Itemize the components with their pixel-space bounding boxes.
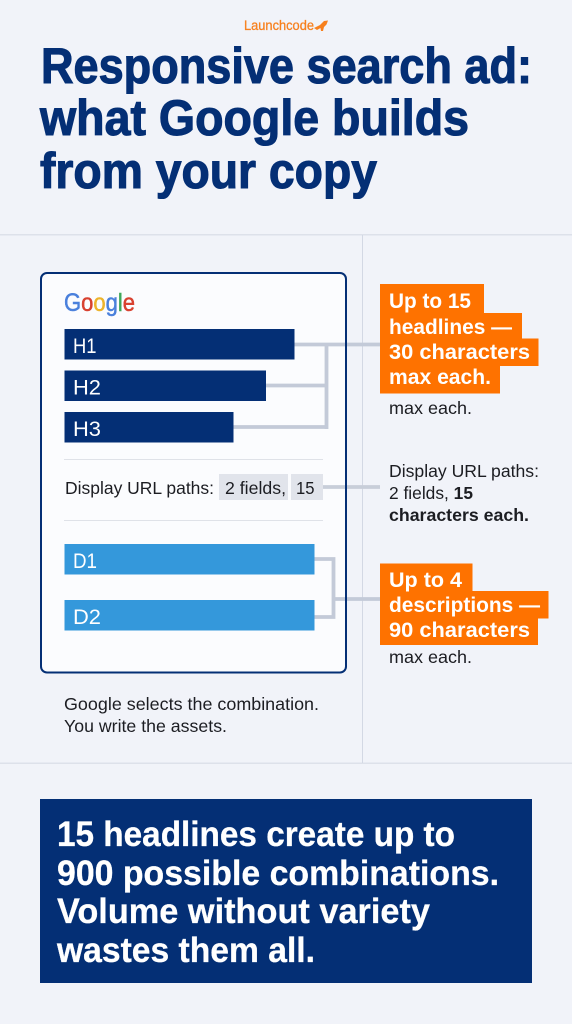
callout: headlines: headlines — bbox=[389, 315, 512, 339]
bar: H2 bbox=[64, 370, 266, 401]
bar: D1 bbox=[64, 544, 314, 574]
callout: display URL paths bbox=[389, 461, 539, 525]
callout: headlines: Up to 15 bbox=[389, 289, 471, 313]
callout: descriptions: Up to 4 bbox=[389, 568, 462, 592]
connector: headlines bbox=[233, 344, 380, 429]
display URL row: 15 bbox=[296, 478, 314, 498]
icon: plane bbox=[314, 20, 328, 31]
title bbox=[39, 38, 532, 199]
bar: H1 bbox=[64, 329, 294, 360]
Google logo: Google bbox=[64, 289, 135, 317]
bar: H2: H2 bbox=[73, 376, 101, 400]
callout: descriptions: descriptions — bbox=[389, 593, 540, 617]
takeaway text: 15 headlines create up to bbox=[57, 815, 455, 854]
display URL row: 2 fields, bbox=[225, 478, 286, 498]
bar: D1: D1 bbox=[73, 550, 97, 573]
takeaway text: 900 possible combinations. bbox=[57, 854, 499, 893]
caption: You write the assets. bbox=[64, 716, 227, 736]
takeaway text: Volume without variety bbox=[57, 892, 431, 931]
panel: takeaway bbox=[40, 799, 532, 983]
takeaway text bbox=[56, 815, 499, 970]
callout: display URL paths: characters each. bbox=[389, 505, 529, 525]
callout: headlines: max each. bbox=[389, 398, 472, 418]
bar: D2: D2 bbox=[73, 606, 101, 629]
display URL row bbox=[65, 474, 323, 500]
callout: display URL paths: Display URL paths: bbox=[389, 461, 539, 481]
connector: display URL bbox=[323, 485, 380, 489]
logo: Launchcode: Launchcode bbox=[244, 17, 314, 33]
callout: descriptions bbox=[380, 564, 548, 667]
bar: D2 bbox=[64, 600, 314, 630]
title: Responsive search ad: bbox=[41, 38, 532, 94]
display URL row: Display URL paths: bbox=[65, 478, 214, 498]
callout: headlines bbox=[380, 284, 538, 418]
callout: headlines: max each. bbox=[389, 365, 491, 389]
panel: ad card bbox=[41, 273, 380, 672]
callout: descriptions: max each. bbox=[389, 647, 472, 667]
takeaway text: wastes them all. bbox=[56, 931, 315, 970]
caption: Google selects the combination. bbox=[64, 694, 319, 714]
callout: headlines: 30 characters bbox=[389, 340, 530, 364]
title: from your copy bbox=[40, 143, 377, 199]
bar: H3 bbox=[64, 412, 234, 442]
title: what Google builds bbox=[39, 90, 469, 146]
callout: display URL paths: 2 fields, 15 bbox=[389, 483, 473, 503]
bar: H3: H3 bbox=[73, 418, 101, 441]
connector: descriptions bbox=[314, 559, 380, 617]
caption bbox=[64, 694, 319, 736]
bar: H1: H1 bbox=[73, 335, 96, 358]
callout: descriptions: 90 characters bbox=[389, 618, 530, 642]
